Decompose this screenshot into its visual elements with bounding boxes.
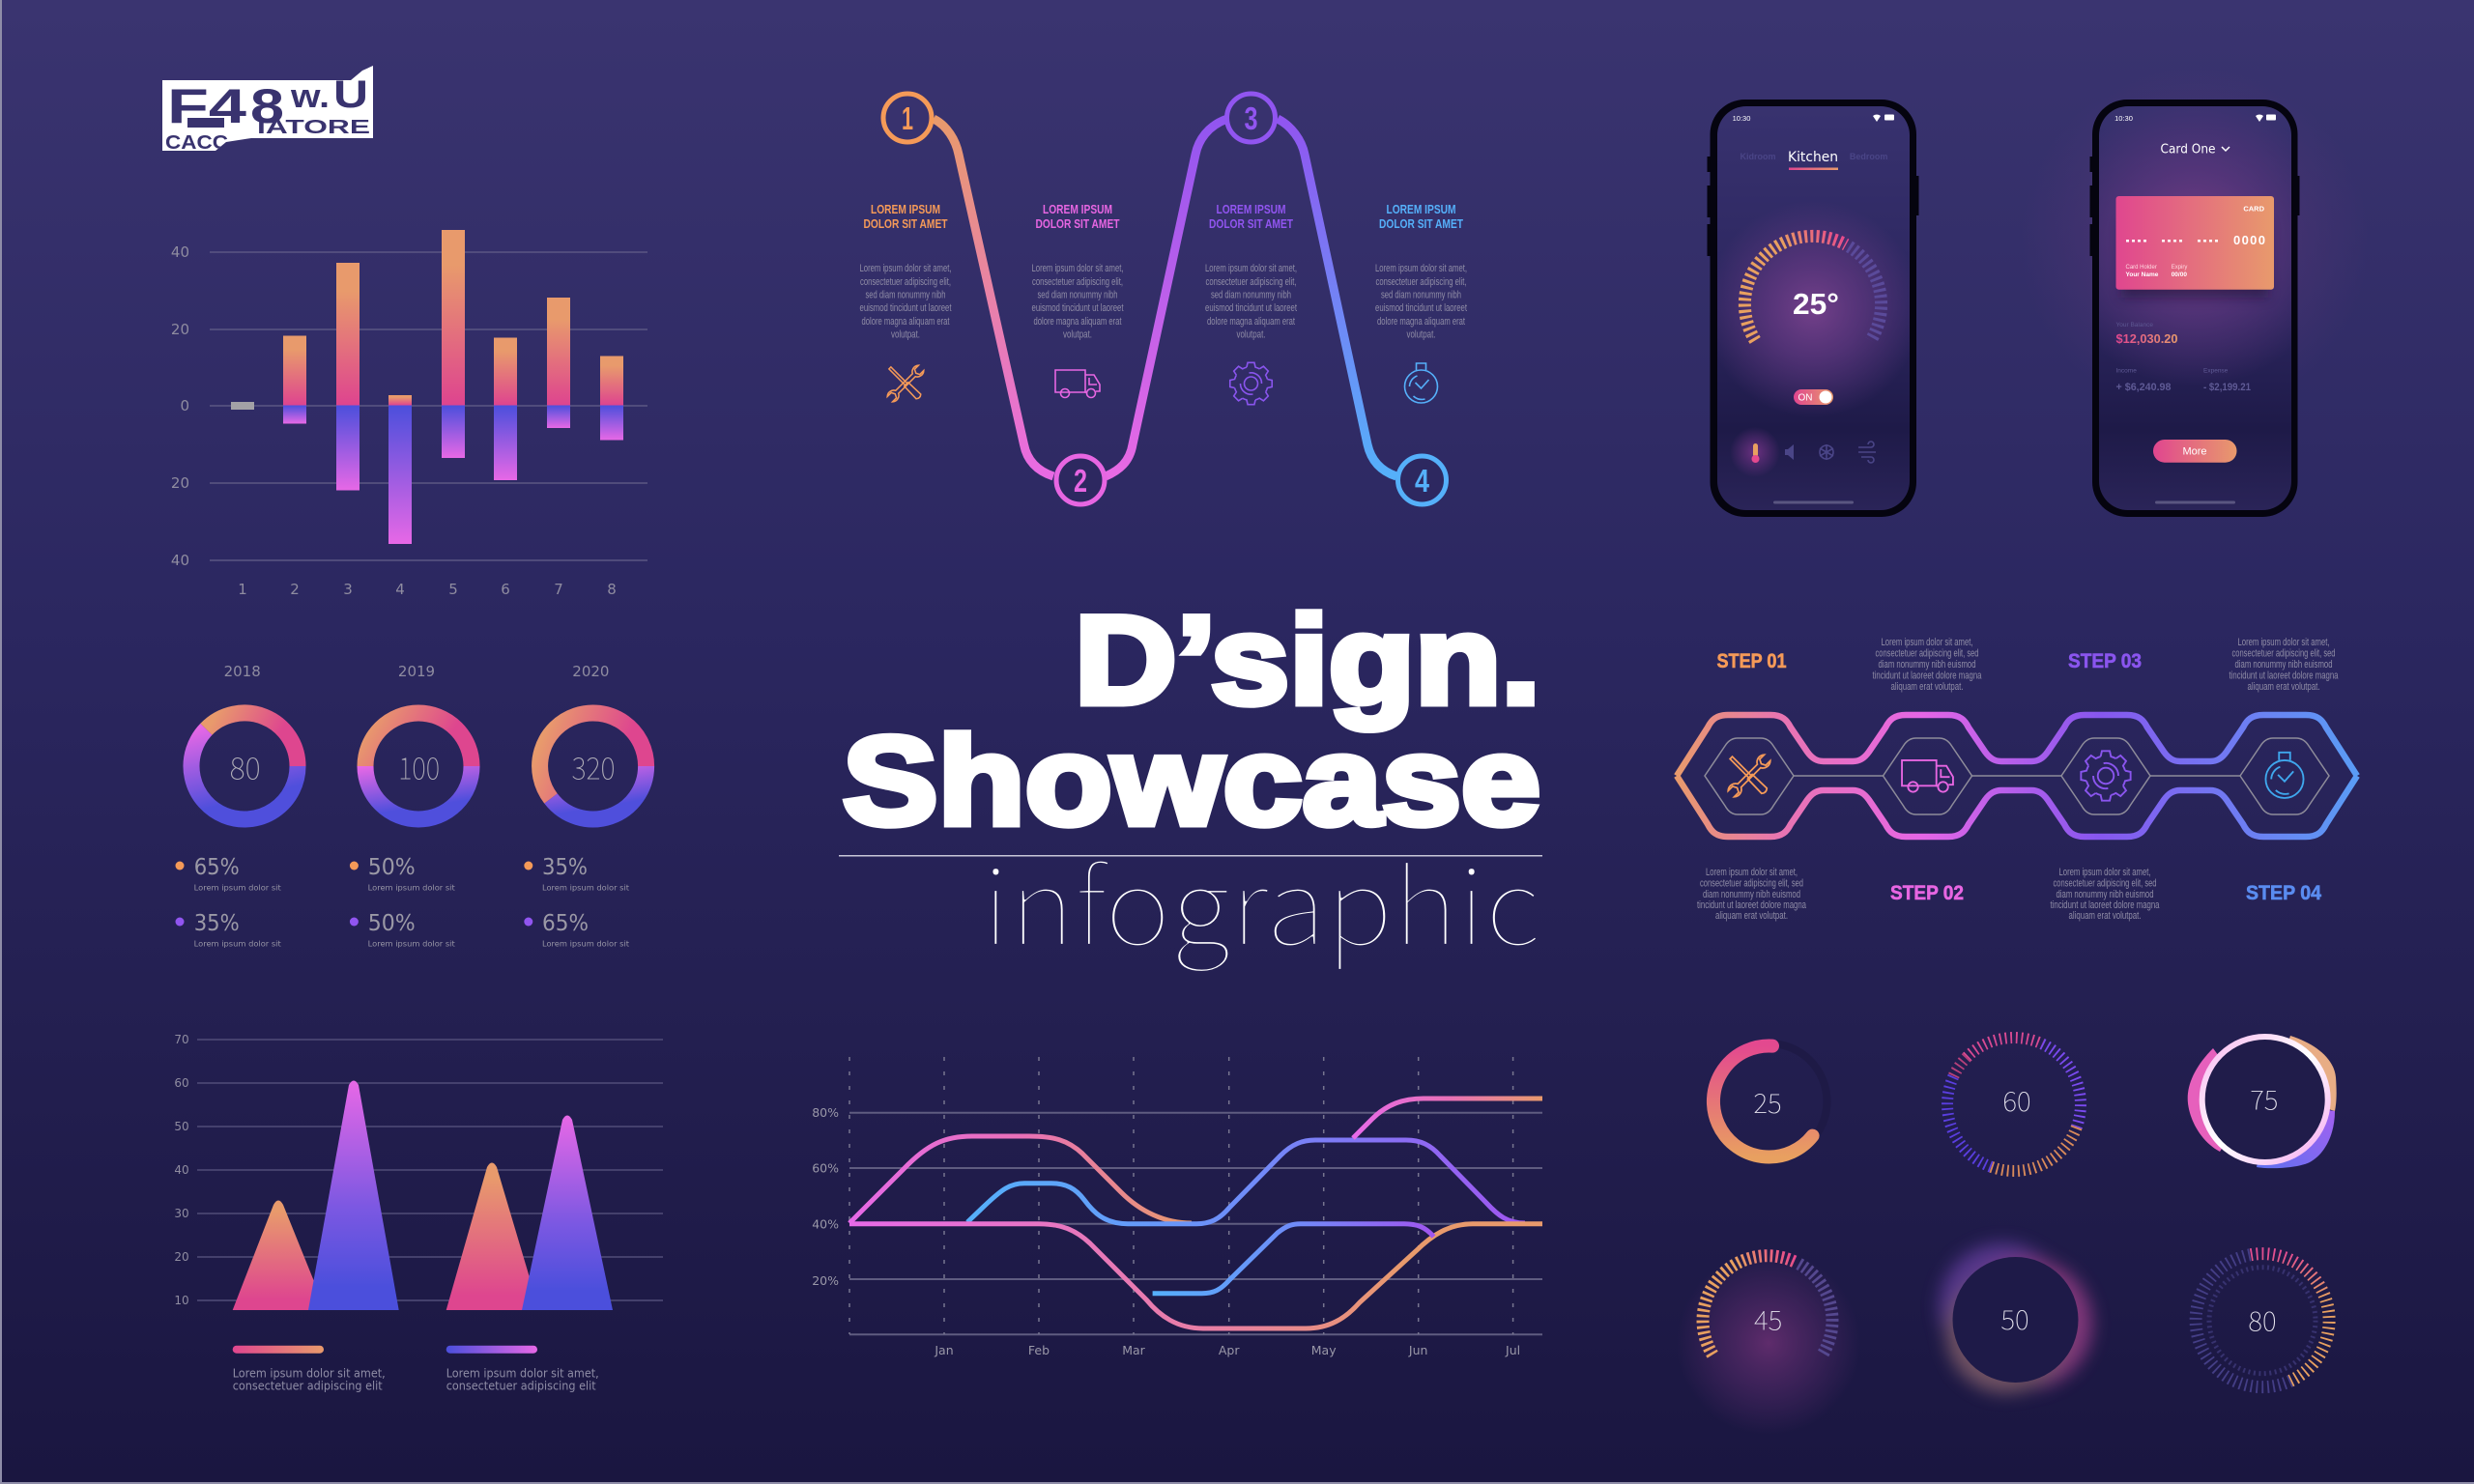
column 2 text: volutpat.: [1063, 328, 1092, 340]
triangle chart axis labels: [174, 1033, 189, 1307]
line chart: [812, 1057, 1542, 1357]
bar chart x axis labels: 1: [238, 581, 247, 598]
gauge 75: 75: [2250, 1080, 2278, 1119]
line chart month labels: Jul: [1505, 1343, 1520, 1357]
wave connector 3: [1278, 119, 1396, 476]
step 04 body: aliquam erat volutpat.: [2248, 681, 2319, 693]
column 4 text: volutpat.: [1407, 328, 1436, 340]
step 01 body: Lorem ipsum dolor sit amet,: [1706, 867, 1798, 878]
triangle series C: [446, 1163, 539, 1310]
column 1 text: DOLOR SIT AMET: [864, 217, 948, 231]
icon: stopwatch: [1405, 363, 1438, 403]
line chart y labels: 20%: [812, 1273, 839, 1288]
column 2 text: Lorem ipsum dolor sit amet,: [1032, 263, 1123, 274]
wave process panel: [860, 94, 1467, 504]
phone 2 credit card: Your Name: [2126, 271, 2159, 278]
step circle 3: [1227, 94, 1276, 142]
legend 2018: 35%: [194, 911, 240, 936]
column 3 text: Lorem ipsum dolor sit amet,: [1205, 263, 1297, 274]
line: top pink to orange: [849, 1136, 1192, 1223]
step 04 body: diam nonummy nibh euismod: [2234, 659, 2333, 671]
bar chart x axis labels: 3: [343, 581, 353, 598]
donut 2020: 2020: [572, 663, 609, 680]
gauge 25: 25: [1753, 1083, 1782, 1122]
legend 2019: 50%: [368, 911, 416, 936]
triangle legend 2: [446, 1346, 599, 1393]
bar chart bars: [231, 230, 623, 544]
phone 2 body: [2092, 100, 2298, 517]
step circle 4: [1397, 456, 1446, 504]
phone 1 status bar: 10:30: [1733, 114, 1750, 123]
icon: gear: [2081, 751, 2131, 801]
column 4 text: LOREM IPSUM: [1386, 203, 1455, 216]
bar chart: [171, 230, 647, 598]
step 03 body: aliquam erat volutpat.: [2068, 910, 2142, 922]
step 04 label: STEP 04: [2246, 882, 2321, 904]
gauge 50: [1940, 1243, 2092, 1393]
phone 2 balance: $12,030.20: [2116, 331, 2178, 346]
column 1 text: [860, 203, 951, 340]
phone 1 room tabs: Kidroom: [1740, 152, 1776, 161]
line: lower blue to purple: [1153, 1224, 1434, 1294]
phone 2 income and expense: - $2,199.21: [2203, 382, 2251, 393]
bar chart y axis labels: 20: [171, 321, 189, 338]
phone 2 screen: [2099, 106, 2291, 510]
phone 2 outer glow: [2021, 68, 2369, 415]
donut 2018: [191, 663, 298, 819]
line chart month labels: Mar: [1122, 1343, 1146, 1357]
phone 1 side buttons: [1709, 157, 1917, 256]
title rule: [839, 855, 1542, 856]
step 01 body: tincidunt ut laoreet dolore magna: [1697, 899, 1807, 911]
gauge 45: [1677, 1251, 1860, 1435]
gauge 50: 50: [2000, 1299, 2029, 1338]
step 04 body: tincidunt ut laoreet dolore magna: [2229, 671, 2339, 682]
column 3 text: euismod tincidunt ut laoreet: [1205, 302, 1297, 314]
step 02 body: diam nonummy nibh euismod: [1879, 659, 1975, 671]
legend 2018: Lorem ipsum dolor sit: [194, 883, 281, 893]
step circle 1: [883, 94, 932, 142]
column 4 text: DOLOR SIT AMET: [1379, 217, 1463, 231]
step 02 body: aliquam erat volutpat.: [1890, 681, 1964, 693]
column 4 text: sed diam nonummy nibh: [1381, 290, 1461, 301]
triangle chart axis labels: 50: [174, 1120, 189, 1133]
triangle chart axis labels: 30: [174, 1207, 189, 1220]
phone 2 card selector: Card One: [2161, 143, 2215, 157]
phone 1 control icons: [1730, 427, 1876, 477]
phone 2 credit card: [2116, 196, 2274, 298]
triangle chart axis labels: 40: [174, 1163, 189, 1177]
bar chart x axis labels: 5: [448, 581, 458, 598]
phone 1 room tabs: Kitchen: [1788, 150, 1838, 165]
column 3 text: DOLOR SIT AMET: [1209, 217, 1293, 231]
step 01 body: [1697, 867, 1807, 922]
phone 2 status bar: [2114, 114, 2276, 123]
bar chart x axis labels: 7: [554, 581, 563, 598]
column 3 text: volutpat.: [1237, 328, 1266, 340]
wave connector 1: [934, 119, 1053, 476]
column 2 text: DOLOR SIT AMET: [1036, 217, 1120, 231]
phone 1 body: [1711, 100, 1916, 517]
bar chart x axis labels: 6: [501, 581, 510, 598]
phone 1 gauge: [1744, 236, 1882, 340]
line chart y labels: [812, 1105, 839, 1288]
icon: truck: [1902, 760, 1953, 792]
icon: truck: [1055, 370, 1100, 398]
line chart month labels: Feb: [1028, 1343, 1050, 1357]
triangle series D: [522, 1115, 613, 1310]
triangle chart: [174, 1033, 663, 1393]
phone 2 credit card: Expiry: [2172, 265, 2187, 271]
step 02 body: Lorem ipsum dolor sit amet,: [1881, 637, 1973, 648]
column 2 text: euismod tincidunt ut laoreet: [1032, 302, 1123, 314]
bar chart y axis labels: 40: [171, 243, 189, 261]
phone 2 home bar: [2155, 500, 2235, 504]
column 3 text: LOREM IPSUM: [1216, 203, 1285, 216]
phone 1 screen: [1717, 106, 1910, 510]
column 3 text: sed diam nonummy nibh: [1211, 290, 1291, 301]
line chart y labels: 60%: [812, 1161, 839, 1175]
gauge 45: 45: [1754, 1300, 1782, 1339]
phone 2 income and expense: [2116, 367, 2251, 393]
phone 2 balance: [2116, 322, 2178, 346]
title: [839, 589, 1542, 976]
column 1 text: Lorem ipsum dolor sit amet,: [860, 263, 951, 274]
phone: thermostat: [1709, 100, 1917, 517]
legend 2020: Lorem ipsum dolor sit: [542, 883, 629, 893]
gauge 80: 80: [2248, 1301, 2277, 1340]
bar chart x axis labels: 2: [290, 581, 300, 598]
column 1 text: dolore magna aliquam erat: [862, 316, 949, 328]
logo: CACC: [165, 132, 228, 154]
legend 2018: [176, 855, 281, 949]
icon: gear: [1230, 362, 1272, 405]
step circle 3: 3: [1245, 100, 1258, 136]
triangle series B: [308, 1080, 399, 1310]
step 01 body: diam nonummy nibh euismod: [1703, 889, 1800, 900]
legend 2018: 65%: [194, 855, 240, 880]
phone 2 status bar: 10:30: [2114, 114, 2133, 123]
donut 2020: 320: [572, 744, 615, 788]
step 03 body: Lorem ipsum dolor sit amet,: [2058, 867, 2151, 878]
legend 2019: Lorem ipsum dolor sit: [368, 883, 455, 893]
logo: w.: [290, 78, 330, 115]
phone 2 more button: More: [2182, 446, 2207, 458]
gauge 60: 60: [2002, 1081, 2031, 1120]
title subtitle: infographic: [982, 825, 1540, 976]
hexagon band bottom: [1677, 776, 2357, 837]
inner hexagon chain: [1705, 738, 2329, 814]
line chart month labels: Jun: [1408, 1343, 1427, 1357]
donut 2020: [540, 663, 647, 819]
bar chart y axis labels: 40: [171, 552, 189, 569]
donut 2019: 2019: [398, 663, 435, 680]
triangle chart axis labels: 70: [174, 1033, 189, 1046]
column 3 text: consectetuer adipiscing elit,: [1206, 276, 1297, 288]
column 1 text: LOREM IPSUM: [871, 203, 940, 216]
logo: [162, 66, 373, 154]
step 01 body: aliquam erat volutpat.: [1715, 910, 1788, 922]
step 01 body: consectetuer adipiscing elit, sed: [1700, 877, 1803, 889]
donut 2018: 80: [230, 744, 261, 788]
column 2 text: LOREM IPSUM: [1043, 203, 1112, 216]
column 4 text: consectetuer adipiscing elit,: [1376, 276, 1467, 288]
column 4 text: Lorem ipsum dolor sit amet,: [1375, 263, 1467, 274]
logo: IATORE: [257, 117, 370, 138]
step 04 body: consectetuer adipiscing elit, sed: [2232, 647, 2335, 659]
column 4 text: [1375, 203, 1467, 340]
phone 2 income and expense: Expense: [2203, 367, 2229, 375]
phone 1 toggle: [1794, 389, 1833, 405]
legend 2019: 50%: [368, 855, 416, 880]
column 2 text: consectetuer adipiscing elit,: [1032, 276, 1123, 288]
phone 2 credit card: CARD: [2243, 205, 2265, 213]
column 1 text: consectetuer adipiscing elit,: [860, 276, 951, 288]
step circle 4: 4: [1415, 463, 1430, 499]
phone 2 credit card: 00/00: [2172, 271, 2187, 278]
step circle 1: 1: [902, 100, 913, 136]
phone 1 room tabs: Bedroom: [1850, 152, 1887, 161]
line chart y labels: 40%: [812, 1217, 839, 1231]
line: bottom pink to orange: [849, 1224, 1542, 1328]
wave connector 2: [1106, 119, 1227, 476]
phone 1 toggle: ON: [1798, 392, 1813, 404]
phone 2 income and expense: + $6,240.98: [2116, 382, 2171, 393]
column 1 text: euismod tincidunt ut laoreet: [860, 302, 951, 314]
bar chart y axis labels: 0: [180, 397, 189, 414]
icon: tools: [886, 364, 925, 403]
logo: F4: [167, 79, 246, 133]
triangle series A: [233, 1200, 326, 1310]
line chart month labels: [934, 1343, 1520, 1357]
line: blue to purple upper: [967, 1140, 1525, 1224]
bar chart x axis labels: [238, 581, 617, 598]
logo: 8: [250, 79, 284, 133]
bar chart x axis labels: 4: [395, 581, 405, 598]
gauge 75: [2188, 1036, 2337, 1168]
triangle legend 1: Lorem ipsum dolor sit amet,: [233, 1366, 386, 1380]
phone 2 credit card: Card Holder: [2126, 265, 2157, 271]
gauge 25: [1711, 1043, 1827, 1159]
phone 2 more button: [2153, 440, 2236, 463]
triangle legend 2: consectetuer adipiscing elit: [446, 1380, 596, 1393]
phone 1 temperature: 25°: [1793, 287, 1839, 321]
phone 2 income and expense: Income: [2116, 367, 2137, 375]
donut 2018: 2018: [224, 663, 261, 680]
donut charts: [176, 663, 647, 949]
triangle chart axis labels: 10: [174, 1294, 189, 1307]
phone 2 side buttons: [2091, 157, 2298, 256]
step 03 body: diam nonummy nibh euismod: [2057, 889, 2153, 900]
donut 2019: [365, 663, 472, 819]
title line 1: D’sign.: [1075, 589, 1540, 730]
triangle legend 2: Lorem ipsum dolor sit amet,: [446, 1366, 599, 1380]
line chart month labels: Jan: [934, 1343, 954, 1357]
hexagon band top: [1677, 715, 2357, 776]
line chart month labels: Apr: [1219, 1343, 1240, 1357]
legend 2020: 65%: [542, 911, 589, 936]
step 03 body: [2051, 867, 2160, 922]
triangle chart axis labels: 20: [174, 1250, 189, 1264]
legend 2019: [350, 855, 455, 949]
bar chart y axis labels: [171, 243, 189, 569]
legend 2020: [524, 855, 629, 949]
logo: U: [333, 73, 368, 116]
phone 2 balance: Your Balance: [2116, 322, 2153, 328]
title line 2: Showcase: [843, 710, 1540, 851]
step 02 label: STEP 02: [1890, 882, 1964, 904]
column 4 text: euismod tincidunt ut laoreet: [1375, 302, 1467, 314]
column 2 text: [1032, 203, 1123, 340]
legend 2020: 35%: [542, 855, 588, 880]
step 01 label: STEP 01: [1716, 650, 1787, 672]
column 3 text: dolore magna aliquam erat: [1207, 316, 1295, 328]
column 2 text: dolore magna aliquam erat: [1034, 316, 1121, 328]
column 1 text: sed diam nonummy nibh: [866, 290, 945, 301]
bar chart y axis labels: 20: [171, 474, 189, 492]
phone 2 credit card: 0000: [2233, 233, 2265, 247]
donut 2019: 100: [398, 744, 440, 788]
column 2 text: sed diam nonummy nibh: [1038, 290, 1117, 301]
line: upper right pink to orange: [1353, 1099, 1542, 1138]
legend 2020: Lorem ipsum dolor sit: [542, 939, 629, 949]
column 3 text: [1205, 203, 1297, 340]
step 03 body: consectetuer adipiscing elit, sed: [2053, 877, 2157, 889]
icon: tools: [1727, 754, 1771, 798]
line chart y labels: 80%: [812, 1105, 839, 1120]
phone 1 home bar: [1773, 500, 1854, 504]
legend 2019: Lorem ipsum dolor sit: [368, 939, 455, 949]
line chart month labels: May: [1311, 1343, 1337, 1357]
step 02 body: tincidunt ut laoreet dolore magna: [1873, 671, 1982, 682]
icon: stopwatch: [2265, 753, 2304, 798]
step 04 body: Lorem ipsum dolor sit amet,: [2238, 637, 2329, 648]
step 03 body: tincidunt ut laoreet dolore magna: [2051, 899, 2160, 911]
legend 2018: Lorem ipsum dolor sit: [194, 939, 281, 949]
step circle 2: [1056, 456, 1105, 504]
column 4 text: dolore magna aliquam erat: [1377, 316, 1465, 328]
step 02 body: [1873, 637, 1982, 693]
triangle chart axis labels: 60: [174, 1076, 189, 1090]
triangle legend 1: [233, 1346, 386, 1393]
gauge 80: [2196, 1254, 2329, 1387]
step 04 body: [2229, 637, 2339, 693]
column 1 text: volutpat.: [891, 328, 920, 340]
step circle 2: 2: [1074, 463, 1087, 499]
hexagon steps panel: [1677, 637, 2357, 922]
radial gauges: [1677, 1036, 2337, 1435]
phone 1 room tabs: [1740, 150, 1887, 170]
phone 1 status bar: [1733, 114, 1894, 123]
phone: wallet: [2068, 100, 2321, 517]
gauge 60: [1947, 1038, 2081, 1171]
step 02 body: consectetuer adipiscing elit, sed: [1875, 647, 1979, 659]
triangle legend 1: consectetuer adipiscing elit: [233, 1380, 383, 1393]
bar chart x axis labels: 8: [607, 581, 617, 598]
step 03 label: STEP 03: [2068, 650, 2142, 672]
